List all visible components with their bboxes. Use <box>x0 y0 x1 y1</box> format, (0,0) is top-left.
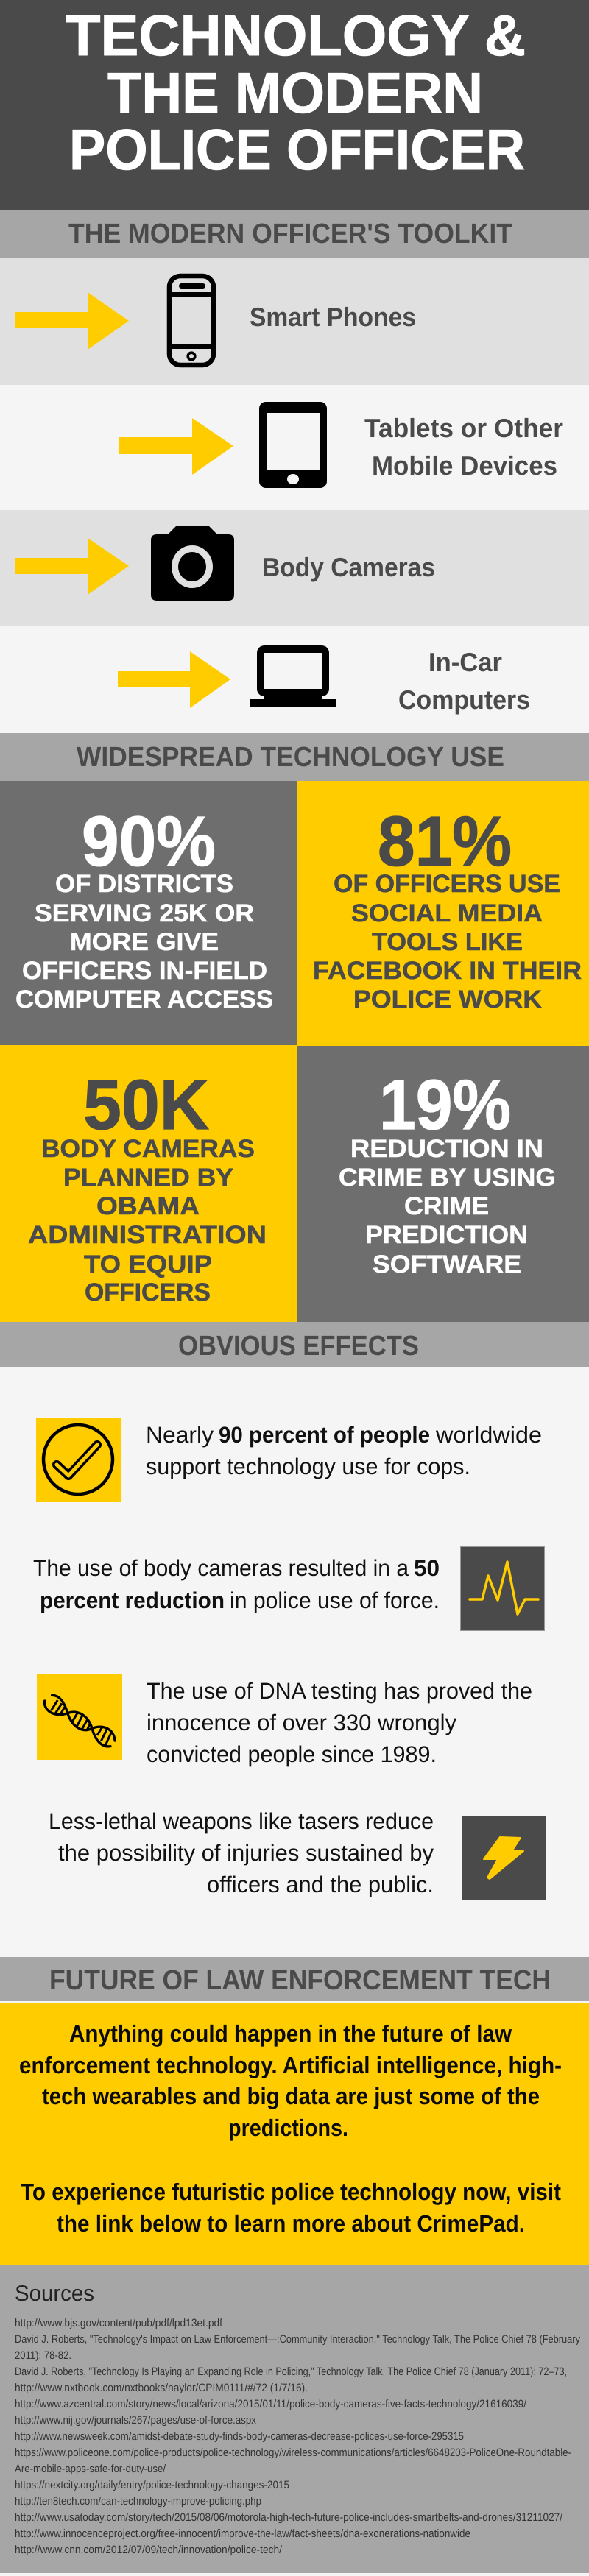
stat panel: 50K body cameras: OFFICERS <box>85 1278 211 1306</box>
icon: camera <box>151 526 234 601</box>
title banner: POLICE OFFICER <box>69 117 525 182</box>
stat panel: 90% of districts: SERVING 25K OR <box>35 899 254 927</box>
source list: http://www.innocenceproject.org/free-innocent/improve-the-law/fact-sheets/dna-exonerations-nationwide <box>15 2527 470 2540</box>
icon: laptop <box>250 645 336 707</box>
panel: future text: To experience futuristic police technology now, visit <box>21 2179 561 2205</box>
stat panel: 81% of officers: SOCIAL MEDIA <box>351 899 543 927</box>
heading: future of law enforcement tech: FUTURE OF LAW ENFORCEMENT TECH <box>49 1965 551 1996</box>
stat panel: 90% of districts: COMPUTER ACCESS <box>15 986 273 1013</box>
stat panel: 81% of officers: 81% <box>378 802 512 881</box>
title banner: THE MODERN <box>107 60 483 125</box>
label: tablets: Tablets or Other <box>364 413 563 443</box>
stat panel: 50K body cameras: 50K <box>83 1066 209 1144</box>
stat panel: 19% reduction <box>297 1046 589 1322</box>
text: body cameras reduction: percent reduction <box>40 1588 225 1613</box>
label: smart phones: Smart Phones <box>250 302 416 332</box>
heading: widespread technology use: WIDESPREAD TECHNOLOGY USE <box>77 742 504 773</box>
arrow: smart phones <box>15 292 129 350</box>
heading: obvious effects: OBVIOUS EFFECTS <box>178 1331 419 1362</box>
arrow: body cameras <box>15 538 129 595</box>
text: less-lethal weapons <box>49 1808 434 1897</box>
text: 90 percent support <box>146 1422 542 1479</box>
stat panel: 50K body cameras: PLANNED BY <box>63 1164 233 1192</box>
stat panel: 19% reduction: SOFTWARE <box>373 1250 521 1278</box>
stat panel: 50K body cameras: OBAMA <box>96 1192 200 1220</box>
panel: future text: predictions. <box>228 2115 348 2141</box>
source list: http://www.nij.gov/journals/267/pages/use-of-force.aspx <box>15 2414 256 2427</box>
text: body cameras reduction: in police use of force. <box>230 1588 440 1613</box>
source list: 2011): 78-82. <box>15 2349 71 2362</box>
source list: http://www.azcentral.com/story/news/local/arizona/2015/01/11/police-body-cameras-five-facts-technology/21616039/ <box>15 2398 527 2410</box>
stat panel: 81% of officers: FACEBOOK IN THEIR <box>313 957 582 985</box>
arrow: in-car computers <box>118 651 230 708</box>
stat panel: 90% of districts <box>0 781 297 1045</box>
text: less-lethal weapons: the possibility of injuries sustained by <box>58 1840 434 1866</box>
label: in-car computers: In-Car <box>428 647 502 677</box>
text: less-lethal weapons: Less-lethal weapons like tasers reduce <box>49 1808 434 1834</box>
label: tablets: Mobile Devices <box>372 450 557 481</box>
source list: Are-mobile-apps-safe-for-duty-use/ <box>15 2463 166 2475</box>
panel: future text: enforcement technology. Artificial intelligence, high- <box>19 2052 562 2078</box>
title banner <box>0 0 589 210</box>
icon: check mark <box>36 1418 121 1502</box>
panel: sources <box>0 2265 589 2573</box>
panel: future text: Anything could happen in the future of law <box>69 2020 512 2047</box>
source list: http://ten8tech.com/can-technology-improve-policing.php <box>15 2495 261 2508</box>
text: body cameras reduction: The use of body cameras resulted in a <box>33 1555 409 1581</box>
stat panel: 81% of officers <box>297 781 589 1046</box>
panel: obvious effects <box>0 1367 589 1957</box>
text: DNA testing <box>147 1678 532 1767</box>
text: 90 percent support: Nearly <box>146 1422 214 1448</box>
heading: obvious effects <box>0 1322 589 1367</box>
panel: toolkit <box>0 258 589 733</box>
title banner: TECHNOLOGY & <box>66 3 526 68</box>
stat panel: 90% of districts: OF DISTRICTS <box>55 870 233 898</box>
text: body cameras reduction <box>33 1555 440 1613</box>
stat panel: 19% reduction: CRIME BY USING <box>339 1164 556 1192</box>
stat panel: 81% of officers: OF OFFICERS USE <box>334 870 560 898</box>
label: body cameras: Body Cameras <box>262 552 435 582</box>
label: in-car computers <box>398 647 530 715</box>
text: 90 percent support: 90 percent of people <box>219 1422 430 1448</box>
heading: future of law enforcement tech <box>0 1957 589 2001</box>
source list: http://www.bjs.gov/content/pub/pdf/lpd13et.pdf <box>15 2317 223 2329</box>
stat panel: 19% reduction: REDUCTION IN <box>350 1135 543 1163</box>
stat panel: 90% of districts: 90% <box>82 802 216 881</box>
panel: future text <box>0 2003 589 2265</box>
stat panel: 19% reduction: CRIME <box>404 1192 489 1220</box>
icon: lightning bolt <box>462 1816 546 1900</box>
stat panel: 19% reduction: PREDICTION <box>365 1221 528 1249</box>
text: 90 percent support: support technology use for cops. <box>146 1454 470 1479</box>
text: DNA testing: convicted people since 1989. <box>147 1741 437 1767</box>
source list: https://nextcity.org/daily/entry/police-technology-changes-2015 <box>15 2479 289 2491</box>
stat panel: 50K body cameras <box>0 1045 297 1322</box>
heading: the modern officer's toolkit <box>0 210 589 258</box>
stat panel: 81% of officers: TOOLS LIKE <box>372 928 523 956</box>
arrow: tablets <box>119 418 233 475</box>
icon: tablet <box>259 402 327 488</box>
stat panel: 19% reduction: 19% <box>379 1066 511 1144</box>
panel: future text: the link below to learn more about CrimePad. <box>57 2210 525 2237</box>
heading: widespread technology use <box>0 733 589 781</box>
text: DNA testing: innocence of over 330 wrongly <box>147 1710 456 1735</box>
label: tablets <box>364 413 563 481</box>
icon: DNA helix <box>37 1674 122 1760</box>
source list: http://www.newsweek.com/amidst-debate-study-finds-body-cameras-decrease-polices-use-force-295315 <box>15 2430 464 2443</box>
stat panel: 50K body cameras: TO EQUIP <box>84 1250 212 1278</box>
text: DNA testing: The use of DNA testing has proved the <box>147 1678 532 1704</box>
stat panel: 50K body cameras: ADMINISTRATION <box>28 1221 267 1249</box>
heading: the modern officer's toolkit: THE MODERN OFFICER'S TOOLKIT <box>68 219 512 250</box>
icon: pulse <box>461 1547 545 1631</box>
source list <box>15 2317 580 2556</box>
text: body cameras reduction: 50 <box>414 1555 440 1581</box>
stat panel: 81% of officers: POLICE WORK <box>353 986 542 1013</box>
text: less-lethal weapons: officers and the public. <box>207 1872 434 1897</box>
stat panel: 90% of districts: OFFICERS IN-FIELD <box>22 957 267 985</box>
stat panel: 90% of districts: MORE GIVE <box>70 928 219 956</box>
heading: sources: Sources <box>15 2282 94 2306</box>
source list: http://www.nxtbook.com/nxtbooks/naylor/CPIM0111/#/72 (1/7/16). <box>15 2382 308 2394</box>
stat panel: 50K body cameras: BODY CAMERAS <box>41 1135 255 1163</box>
icon: smart phone <box>169 276 214 365</box>
panel: future text: tech wearables and big data are just some of the <box>42 2083 540 2109</box>
label: in-car computers: Computers <box>398 684 530 715</box>
text: 90 percent support: worldwide <box>435 1422 542 1448</box>
source list: http://www.cnn.com/2012/07/09/tech/innovation/police-tech/ <box>15 2544 283 2556</box>
